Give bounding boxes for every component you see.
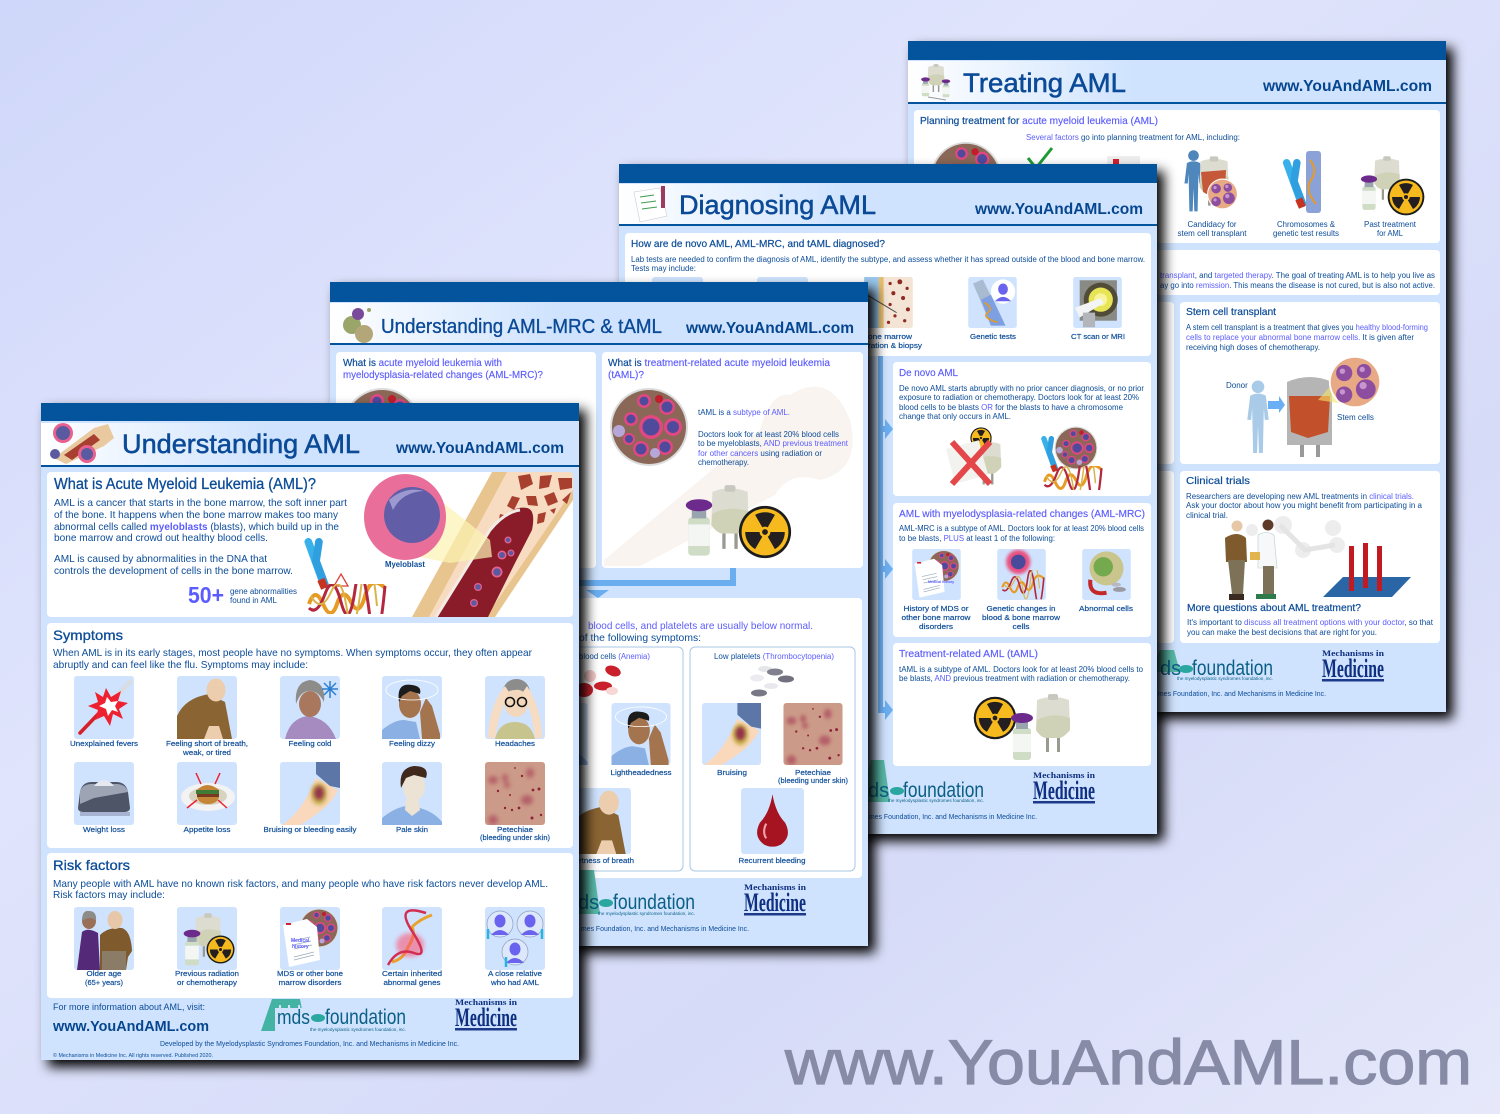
footer: more information: For more information about AML, visit: bbox=[53, 1002, 205, 1012]
title: Diagnosing AML: Diagnosing AML bbox=[679, 190, 876, 220]
box: thrombocytopenia: (bleeding under skin) bbox=[778, 776, 848, 785]
panel: planning treatment: for AML bbox=[1377, 229, 1404, 238]
icon: blood test tile bbox=[652, 277, 703, 328]
panel: lab tests bbox=[625, 233, 1151, 356]
panel: symptoms: Unexplained fevers bbox=[70, 739, 138, 748]
panel: symptoms: (bleeding under skin) bbox=[480, 833, 550, 842]
panel: stem cell transplant: Donor bbox=[1226, 381, 1248, 390]
panel: planning treatment: Chromosomes & bbox=[1277, 220, 1336, 229]
panel: AML-MRC question bbox=[336, 352, 596, 568]
footer logos: Treating sheet: Mechanisms in bbox=[1322, 649, 1385, 658]
footer logos: Diagnosing sheet: mes Foundation, Inc. and Mechanisms in Medicine Inc. bbox=[869, 812, 1037, 821]
panel: what is AML bbox=[47, 472, 573, 617]
sheet: Understanding AML bbox=[41, 403, 586, 1067]
panel: clinical trials: Ask your doctor about how you might benefit from participating in a bbox=[1186, 501, 1423, 510]
panel: planning treatment: stem cell transplant bbox=[1178, 229, 1247, 238]
panel: risk factors: Older age bbox=[86, 969, 122, 978]
panel: risk factors: who had AML bbox=[490, 978, 539, 987]
icon: inherited genes bbox=[382, 907, 442, 970]
icon: donor silhouette bbox=[1247, 380, 1269, 453]
panel: AML-MRC: History of MDS or bbox=[904, 604, 969, 613]
panel: lab tests: How are de novo AML, AML-MRC, and tAML diagnosed? bbox=[631, 238, 885, 250]
icon: transplant candidacy bbox=[1184, 150, 1238, 211]
icon: test tubes bbox=[1323, 543, 1411, 597]
copyright: © Mechanisms in Medicine Inc. All rights reserved. Published 2020. bbox=[53, 1052, 213, 1059]
icon: unexplained fevers bbox=[74, 676, 134, 739]
panel: de novo AML: De novo AML starts abruptly with no prior cancer diagnosis, or no prior bbox=[899, 384, 1144, 393]
arrows: subtype connectors bbox=[878, 356, 893, 720]
panel: clinical trials: Clinical trials bbox=[1186, 475, 1250, 487]
icon: radiation kit bbox=[974, 694, 1070, 760]
arrow: panels to symptoms bbox=[570, 566, 736, 598]
panel: de novo AML: change that only occurs in AML. bbox=[899, 412, 1011, 421]
panel: what is AML: AML is caused by abnormalities in the DNA that bbox=[54, 553, 267, 565]
panel: de novo AML: De novo AML bbox=[899, 367, 958, 379]
icon: genetic tests bbox=[968, 277, 1017, 328]
panel: clinical trials: Researchers are developing new AML treatments in clinical trials. bbox=[1186, 492, 1414, 501]
icon: doctor bbox=[1250, 520, 1277, 599]
footer logos: Treating sheet: ds bbox=[1160, 658, 1181, 680]
icon: close relative bbox=[485, 907, 545, 970]
panel: AML-MRC: disorders bbox=[919, 622, 953, 631]
panel: tAML question: to be myeloblasts, AND previous treatment bbox=[698, 439, 849, 448]
icon: patient bbox=[1225, 520, 1247, 600]
panel: stem cell transplant: A stem cell transplant is a treatment that gives you healthy blood-forming bbox=[1186, 323, 1428, 332]
panel: treatment goal: transplant, and targeted therapy. The goal of treating AML is to help you live as bbox=[1160, 271, 1435, 280]
panel: stem cell transplant: cells to replace your abnormal bone marrow cells. It is given after bbox=[1186, 333, 1414, 342]
box: thrombocytopenia: Recurrent bleeding bbox=[738, 856, 806, 865]
panel: tAML bbox=[893, 643, 1151, 766]
panel: risk factors: A close relative bbox=[488, 969, 542, 978]
panel: risk factors: Certain inherited bbox=[382, 969, 442, 978]
footer logos: Diagnosing sheet: the myelodysplastic syndromes foundation, inc. bbox=[888, 798, 984, 803]
panel: de novo AML bbox=[893, 362, 1151, 506]
icon: stem cell bag bbox=[1287, 370, 1352, 457]
panel: risk factors: Risk factors may include: bbox=[53, 889, 165, 901]
panel: planning treatment: Several factors go into planning treatment for AML, including: bbox=[1026, 133, 1240, 142]
panel: symptoms: Weight loss bbox=[83, 825, 125, 834]
icon: checklist bbox=[634, 186, 667, 222]
icon: abnormal cells bbox=[1082, 549, 1131, 600]
sheet: Understanding AML-MRC and tAML bbox=[330, 282, 875, 953]
panel: AML-MRC: to be blasts, PLUS at least 1 of the following: bbox=[899, 534, 1055, 543]
box: anemia: blood cells (Anemia) bbox=[579, 652, 650, 661]
icon: chromosome bbox=[308, 542, 325, 588]
sheet: Treating AML bbox=[908, 41, 1453, 719]
panel: symptoms: Symptoms bbox=[53, 627, 123, 643]
panel: stem cell transplant: Stem cells bbox=[1337, 413, 1374, 422]
panel: AML-MRC: cells bbox=[1012, 622, 1030, 631]
panel: clinical trials: you can make the best decisions that are right for you. bbox=[1187, 628, 1377, 637]
icon: CT scanner bbox=[1073, 277, 1122, 328]
panel: planning treatment: genetic test results bbox=[1273, 229, 1339, 238]
icon: lightheadedness bbox=[611, 703, 671, 765]
footer logos: Diagnosing sheet: Medicine bbox=[1033, 776, 1095, 805]
icon: stem cells bbox=[1329, 356, 1381, 408]
icon: short of breath bbox=[177, 676, 237, 739]
footer logos: Diagnosing sheet: ds bbox=[868, 780, 889, 802]
title: Understanding AML: Understanding AML bbox=[122, 429, 360, 459]
panel: tAML question: tAML is a subtype of AML. bbox=[698, 408, 790, 417]
panel: risk factors: Many people with AML have no known risk factors, and many people who have risk factors never develop AML. bbox=[53, 878, 548, 890]
icon: bone marrow biopsy bbox=[864, 277, 913, 328]
icon: feeling dizzy bbox=[382, 676, 442, 739]
box: anemia bbox=[500, 647, 683, 871]
panel: tAML: be blasts, AND previous treatment with radiation or chemotherapy. bbox=[899, 674, 1130, 683]
panel: tAML question: Doctors look for at least 20% blood cells bbox=[698, 430, 839, 439]
footer logos: MRC sheet: the myelodysplastic syndromes foundation, inc. bbox=[598, 911, 695, 916]
panel: AML-MRC: AML with myelodysplasia-related changes (AML-MRC) bbox=[899, 508, 1145, 520]
panel: AML-MRC: blood & bone marrow bbox=[982, 613, 1061, 622]
callout: myeloblast cone bbox=[395, 497, 492, 563]
panel: AML-MRC bbox=[893, 503, 1151, 637]
illustration: bone marrow cross-section bbox=[412, 472, 573, 617]
panel: planning treatment: Planning treatment for acute myeloid leukemia (AML) bbox=[920, 115, 1158, 127]
panel: tAML: tAML is a subtype of AML. Doctors look for at least 20% blood cells to bbox=[899, 665, 1144, 674]
panel: AML-MRC: Genetic changes in bbox=[986, 604, 1056, 613]
icon: bone with cells bbox=[50, 423, 114, 464]
icon: no prior treatment bbox=[946, 427, 1001, 484]
logo: Mechanisms in Medicine: Mechanisms in bbox=[455, 998, 518, 1007]
panel: risk factors: Previous radiation bbox=[175, 969, 239, 978]
url: www.YouAndAML.com bbox=[395, 440, 564, 457]
logo: MDS Foundation bbox=[261, 999, 406, 1032]
icon: myeloblast cell bbox=[364, 474, 446, 560]
panel: lab tests: one marrow bbox=[868, 332, 913, 341]
panel: lab tests: Tests may include: bbox=[631, 264, 696, 273]
footer logos: MRC sheet: foundation bbox=[613, 891, 695, 914]
logo: Mechanisms in Medicine bbox=[455, 998, 518, 1032]
box: thrombocytopenia: Low platelets (Thrombocytopenia) bbox=[714, 652, 834, 661]
panel: lab tests: ration & biopsy bbox=[868, 341, 922, 350]
stat: 50+ gene abnormalities: gene abnormalities bbox=[230, 587, 297, 596]
panel: risk factors: MDS or other bone bbox=[277, 969, 343, 978]
panel: symptoms of low counts: blood cells, and platelets are usually below normal. bbox=[588, 620, 813, 632]
icon: petechiae bbox=[783, 703, 843, 765]
panel: treatment goal bbox=[914, 250, 1440, 295]
panel: risk factors: abnormal genes bbox=[384, 978, 441, 987]
panel: symptoms: Headaches bbox=[495, 739, 535, 748]
title: Understanding AML-MRC & tAML bbox=[381, 316, 662, 338]
panel: AML-MRC: other bone marrow bbox=[902, 613, 971, 622]
icon: radiation kit bbox=[686, 485, 791, 558]
stat: 50+ gene abnormalities: found in AML bbox=[230, 596, 278, 605]
panel: planning treatment: Candidacy for bbox=[1188, 220, 1237, 229]
footer logos: MRC sheet: Medicine bbox=[744, 888, 806, 917]
panel: symptoms: weak, or tired bbox=[182, 748, 231, 757]
panel: tAML question: What is treatment-related acute myeloid leukemia bbox=[608, 357, 830, 369]
panel: stem cell transplant: receiving high doses of chemotherapy. bbox=[1186, 343, 1320, 352]
icon: past treatment bbox=[1361, 156, 1424, 215]
icon: petechiae bbox=[485, 762, 545, 825]
panel: de novo AML: exposure to radiation or chemotherapy. Doctors look for at least 20% bbox=[899, 393, 1139, 402]
panel: symptoms: Feeling short of breath, bbox=[166, 739, 248, 748]
icon: MDS history bbox=[912, 549, 961, 600]
panel: clinical trials: It's important to discuss all treatment options with your doctor, so that bbox=[1187, 618, 1434, 627]
box: thrombocytopenia: Bruising bbox=[717, 768, 747, 777]
footer: more information bbox=[52, 1002, 209, 1035]
footer logos: Treating sheet: Medicine bbox=[1322, 654, 1384, 683]
title: Treating AML: Treating AML bbox=[963, 68, 1126, 98]
icon: blood drop bbox=[741, 788, 804, 854]
footer logos: Treating sheet: foundation bbox=[1192, 657, 1273, 680]
box: anemia: Lightheadedness bbox=[610, 768, 672, 777]
panel: risk factors: Risk factors bbox=[53, 857, 130, 873]
icon: appetite loss bbox=[177, 762, 237, 825]
panel: symptoms: When AML is in its early stages, most people have no symptoms. When symptoms occur, they often appear bbox=[53, 647, 532, 659]
panel: symptoms of low counts bbox=[500, 598, 862, 878]
icon: bruising bbox=[280, 762, 340, 825]
icon: previous radiation bbox=[177, 907, 237, 970]
panel: clinical trials bbox=[1180, 471, 1440, 643]
icon: older age bbox=[74, 907, 134, 970]
faint bone backdrop bbox=[604, 387, 853, 566]
footer logos: Treating sheet: the myelodysplastic syndromes foundation, inc. bbox=[1177, 676, 1273, 681]
panel: symptoms: Bruising or bleeding easily bbox=[264, 825, 357, 834]
icon: genetic changes bbox=[997, 549, 1046, 605]
panel: treatment goal: ay go into remission. This means the disease is not cured, but is also not active. bbox=[1160, 281, 1435, 290]
logo: MDS Foundation: the myelodysplastic syndromes foundation, inc. bbox=[310, 1027, 406, 1032]
box: thrombocytopenia: Petechiae bbox=[795, 768, 831, 777]
url: www.YouAndAML.com bbox=[974, 201, 1143, 218]
watermark: website address: www.YouAndAML.com bbox=[784, 1028, 1472, 1098]
credit line: Developed by the Myelodysplastic Syndromes Foundation, Inc. and Mechanisms in Medicine Inc. bbox=[160, 1039, 459, 1048]
icon: marrow and chromosome bbox=[1044, 427, 1102, 506]
icon: MDS history: Medical history bbox=[928, 580, 954, 584]
icon: weight loss bbox=[74, 762, 134, 825]
panel: clinical trials: More questions about AML treatment? bbox=[1187, 602, 1361, 614]
panel: de novo AML: blood cells to be blasts OR for the blasts to have a chromosome bbox=[899, 403, 1124, 412]
logo: MDS Foundation: foundation bbox=[325, 1006, 406, 1029]
panel: lab tests: Lab tests are needed to confirm the diagnosis of AML, identify the subtype, and assess whether it has spread outside of the blood and bone marrow. bbox=[631, 255, 1145, 264]
icon: chromosome and tube bbox=[1287, 151, 1321, 213]
panel: symptoms: Pale skin bbox=[396, 825, 428, 834]
icon: abnormal cells cluster bbox=[343, 308, 373, 343]
panel: AML-MRC: AML-MRC is a subtype of AML. Doctors look for at least 20% blood cells bbox=[899, 524, 1144, 533]
icon: feeling cold bbox=[280, 676, 340, 739]
panel: what is AML: bone marrow and crowd out healthy blood cells. bbox=[54, 532, 268, 544]
footer logos: MRC sheet: mes Foundation, Inc. and Mechanisms in Medicine Inc. bbox=[581, 924, 749, 933]
icon: headaches bbox=[485, 676, 545, 739]
icon: MDS medical history bbox=[280, 907, 340, 970]
panel: symptoms: Appetite loss bbox=[184, 825, 231, 834]
footer logos: Diagnosing sheet: Mechanisms in bbox=[1033, 771, 1096, 780]
panel: risk factors: marrow disorders bbox=[278, 978, 342, 987]
panel: symptoms bbox=[47, 623, 573, 848]
panel: AML-MRC question: What is acute myeloid leukemia with bbox=[343, 357, 502, 369]
logo: MDS Foundation: mds bbox=[277, 1007, 310, 1029]
panel: symptoms: Feeling dizzy bbox=[389, 739, 435, 748]
panel: risk factors: or chemotherapy bbox=[177, 978, 237, 987]
panel: what is AML: abnormal cells called myeloblasts (blasts), which build up in the bbox=[54, 521, 339, 533]
footer logos: Treating sheet bbox=[1150, 649, 1385, 698]
panel: AML-MRC: Abnormal cells bbox=[1079, 604, 1133, 613]
icon: molecule bbox=[1246, 516, 1345, 558]
panel: planning treatment bbox=[914, 110, 1440, 243]
panel stubs left column bbox=[1100, 302, 1174, 464]
icon: marrow circle bbox=[610, 388, 688, 466]
icon: warning triangle bbox=[334, 574, 348, 586]
stat: 50+ gene abnormalities: 50+ bbox=[188, 582, 224, 608]
panel: tAML: Treatment-related AML (tAML) bbox=[899, 648, 1038, 660]
panel: stem cell transplant bbox=[1180, 302, 1440, 464]
panel: tAML question: for other cancers using radiation or bbox=[698, 449, 822, 458]
icon: bruising bbox=[702, 703, 761, 765]
panel: tAML question bbox=[602, 352, 863, 568]
icon: shortness of breath bbox=[568, 788, 631, 854]
panel: symptoms: Feeling cold bbox=[288, 739, 332, 748]
panel: what is AML: controls the development of cells in the bone marrow. bbox=[54, 565, 293, 577]
panel: tAML question: chemotherapy. bbox=[698, 458, 749, 467]
logo: Mechanisms in Medicine: Medicine bbox=[455, 1003, 517, 1032]
box: thrombocytopenia bbox=[690, 647, 855, 871]
footer: more information: www.YouAndAML.com bbox=[52, 1019, 209, 1035]
url: www.YouAndAML.com bbox=[1262, 78, 1432, 95]
panel: symptoms: abruptly and can feel like the flu. Symptoms may include: bbox=[53, 659, 308, 671]
url: www.YouAndAML.com bbox=[685, 320, 854, 337]
sheet: Diagnosing AML bbox=[619, 164, 1164, 841]
panel: planning treatment: Past treatment bbox=[1364, 220, 1417, 229]
icon: DNA helix bbox=[309, 561, 385, 636]
panel: lab tests: CT scan or MRI bbox=[1071, 332, 1125, 341]
icon: imaging tile bbox=[757, 277, 808, 328]
panel: AML-MRC question: myelodysplasia-related changes (AML-MRC)? bbox=[343, 369, 543, 381]
panel: risk factors: (65+ years) bbox=[85, 978, 123, 987]
panel: tAML question: (tAML)? bbox=[608, 369, 644, 381]
panel: what is AML: What is Acute Myeloid Leukemia (AML)? bbox=[54, 476, 316, 493]
box: anemia: rtness of breath bbox=[579, 856, 634, 865]
panel: what is AML: Myeloblast bbox=[385, 560, 425, 569]
panel: what is AML: of the bone. It happens when the bone marrow makes too many bbox=[54, 509, 339, 521]
panel: lab tests: Genetic tests bbox=[970, 332, 1016, 341]
footer logos: Treating sheet: mes Foundation, Inc. and Mechanisms in Medicine Inc. bbox=[1158, 689, 1326, 698]
footer logos: MRC sheet: ds bbox=[578, 892, 599, 914]
panel: symptoms of low counts: of the following symptoms: bbox=[579, 632, 701, 644]
stat: 50+ gene abnormalities bbox=[188, 582, 297, 608]
footer logos: MRC sheet: Mechanisms in bbox=[744, 883, 807, 892]
panel: symptoms: Petechiae bbox=[497, 825, 533, 834]
footer logos: Diagnosing sheet: foundation bbox=[903, 779, 984, 802]
icon: treatment supplies bbox=[921, 64, 950, 100]
panel: clinical trials: clinical trial. bbox=[1186, 511, 1228, 520]
panel: what is AML: AML is a cancer that starts in the bone marrow, the soft inner part bbox=[54, 497, 347, 509]
panel: risk factors bbox=[47, 853, 573, 998]
icon: MDS medical history: Medical bbox=[291, 938, 310, 944]
panel: stem cell transplant: Stem cell transplant bbox=[1186, 306, 1276, 318]
icon: MDS medical history: history bbox=[292, 944, 309, 950]
footer logos: Diagnosing sheet bbox=[860, 760, 1096, 821]
arrow: donor to bag bbox=[1268, 396, 1285, 413]
icon: pale skin bbox=[382, 762, 442, 825]
footer logos: MRC sheet bbox=[570, 870, 807, 933]
